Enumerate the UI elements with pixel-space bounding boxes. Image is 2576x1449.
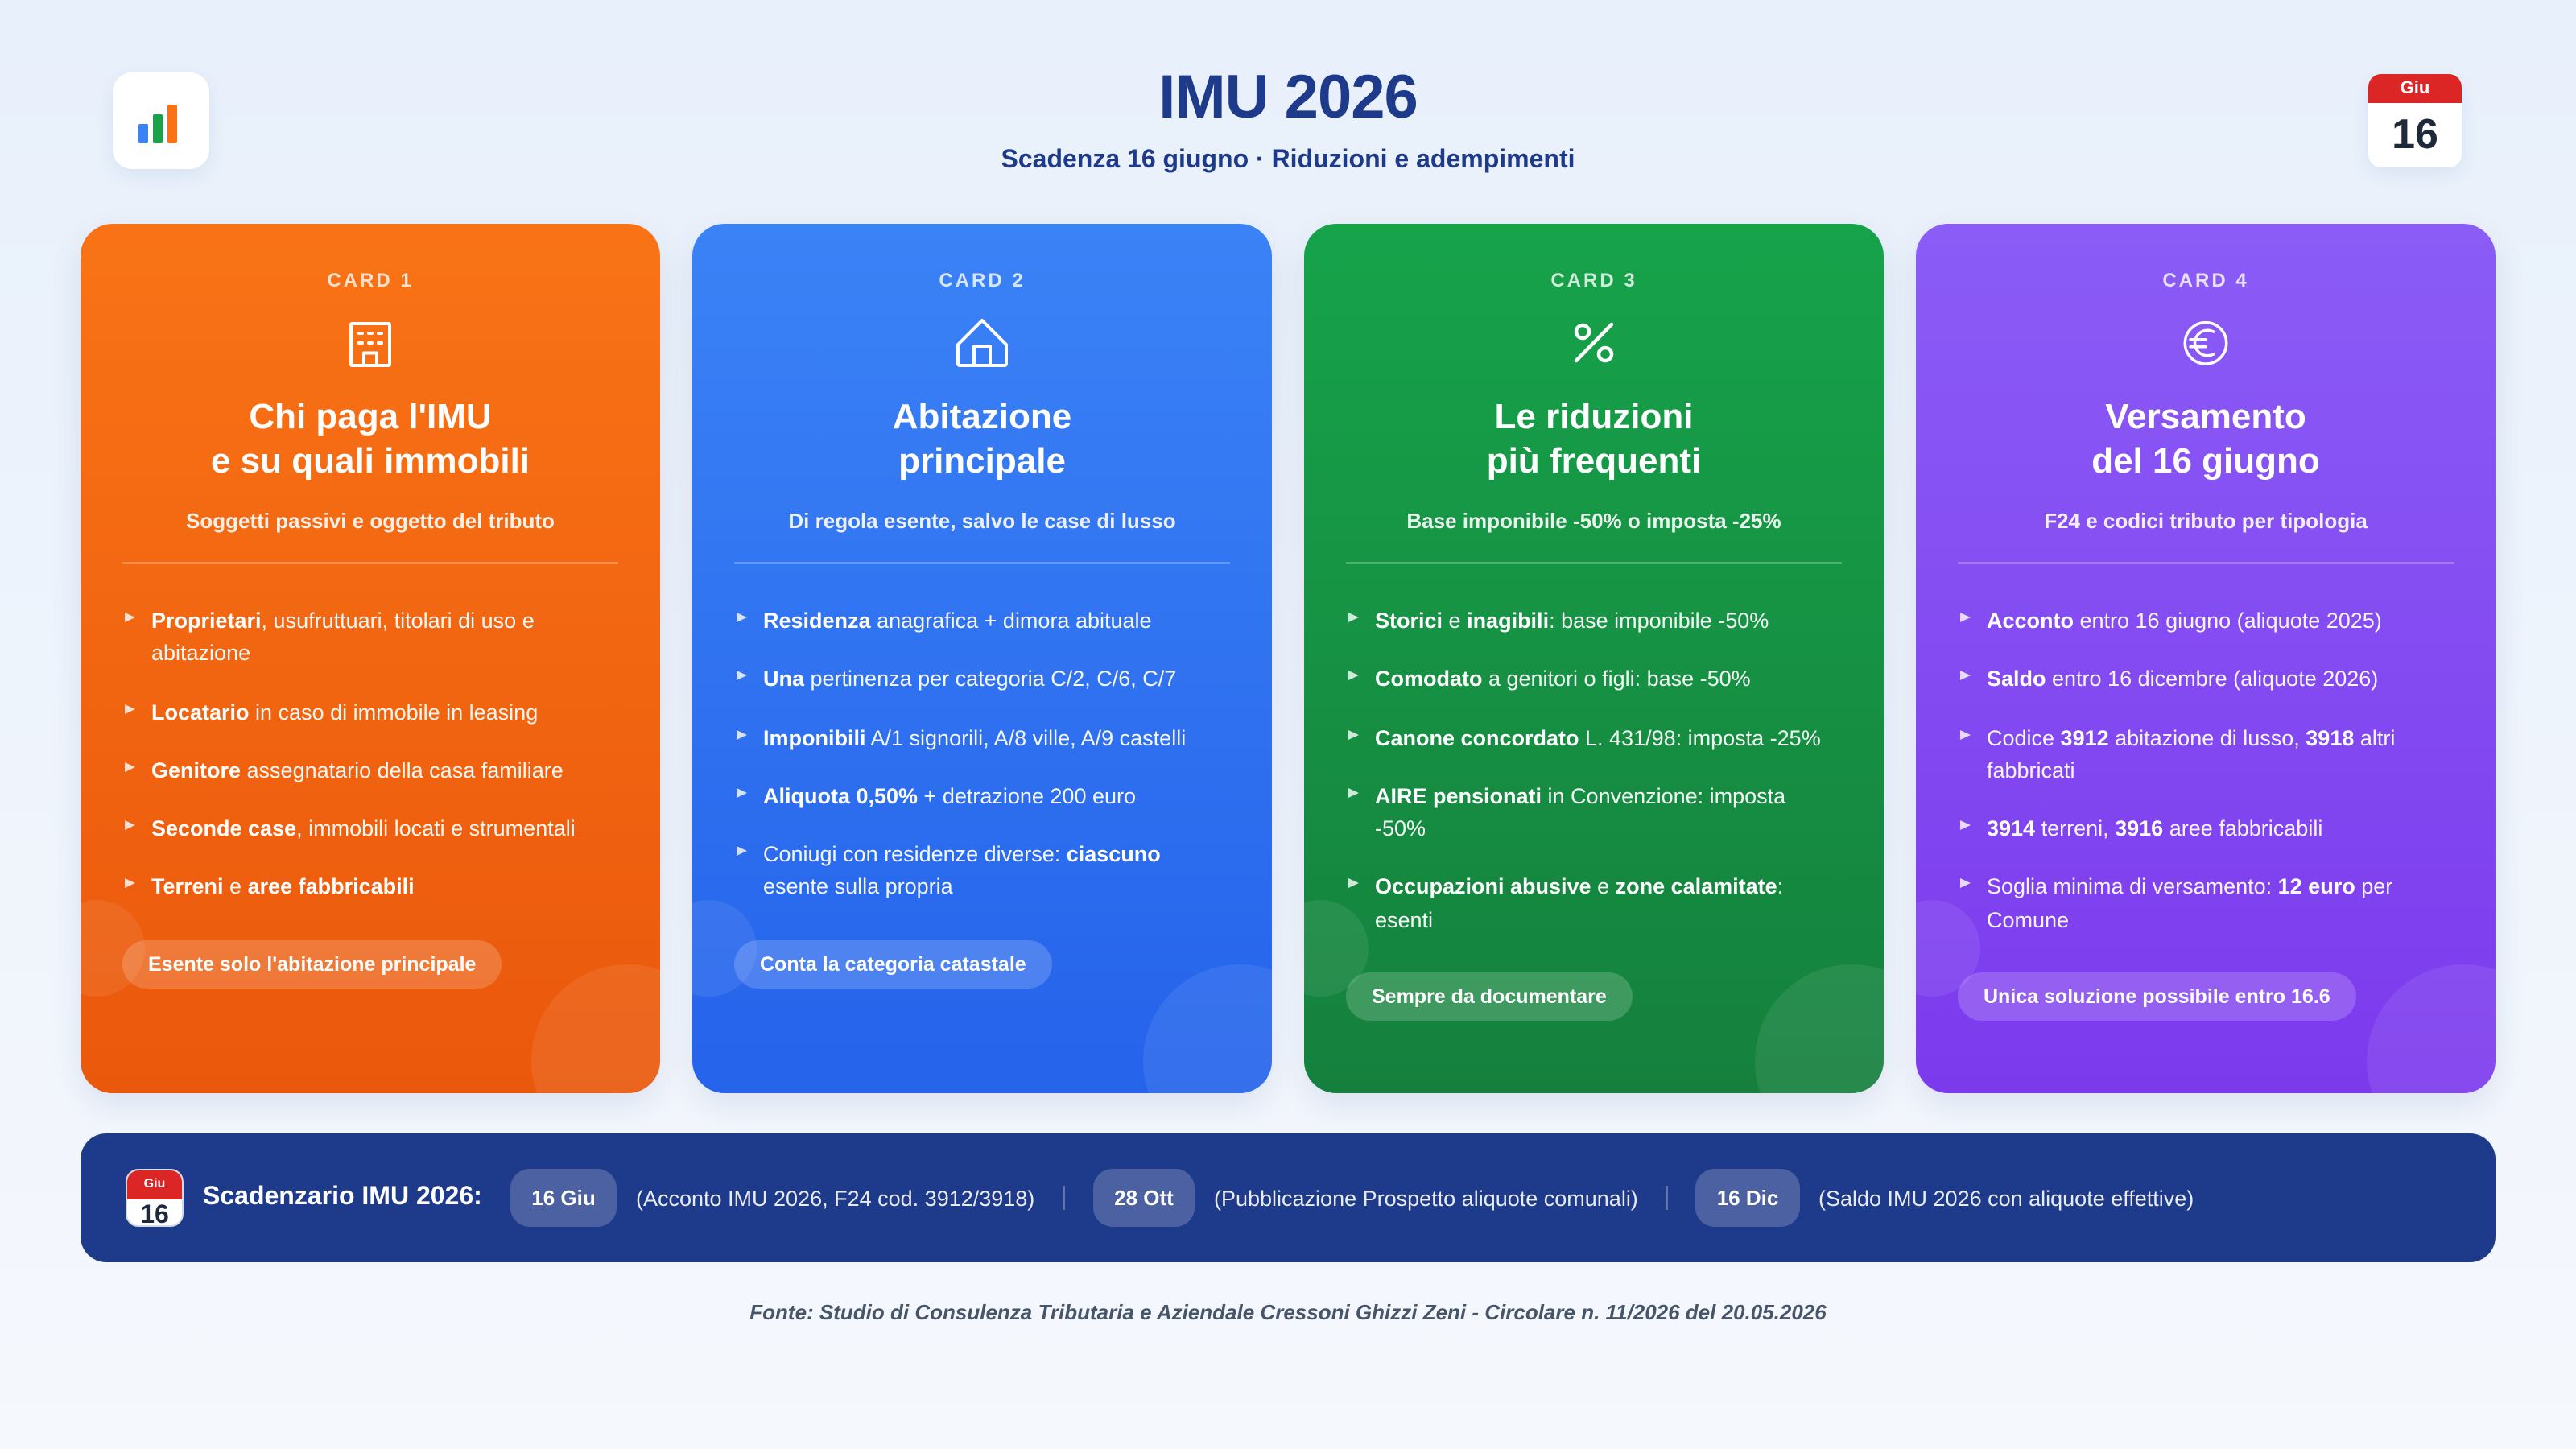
icon: small calendar: Giu (144, 1177, 165, 1191)
icon: percent (1575, 322, 1613, 362)
date pill: 16 Dic (1695, 1169, 1800, 1227)
card 3 callout (1346, 972, 1633, 1021)
card 3 list: Comodato a genitori o figli: base -50% (1375, 667, 1751, 691)
card 2 list: Residenza anagrafica + dimora abituale (763, 609, 1152, 633)
panel: card 3 (1304, 224, 1884, 1093)
card 1 callout (122, 940, 502, 989)
card 4 heading (2091, 397, 2320, 481)
card 3 label: CARD 3 (1550, 270, 1637, 291)
card 3 list: AIRE pensionati in Convenzione: imposta -50% (1375, 784, 1785, 840)
card 2 list: Una pertinenza per categoria C/2, C/6, C/7 (763, 667, 1176, 691)
card 2 label: CARD 2 (939, 270, 1026, 291)
card 3 heading (1487, 397, 1701, 481)
card 4 callout (1958, 972, 2356, 1021)
card 1 subheading: Soggetti passivi e oggetto del tributo (186, 509, 555, 533)
card 1 heading: Chi paga l'IMU (249, 397, 492, 436)
card 1 list (125, 609, 576, 898)
panel: deadline bar (80, 1133, 2496, 1262)
card 2 heading: Abitazione (893, 397, 1071, 436)
subtitle: Scadenza 16 giugno · Riduzioni e adempimenti (1001, 144, 1575, 173)
card 3 list: Storici e inagibili: base imponibile -50% (1375, 609, 1769, 633)
card 4 list: Saldo entro 16 dicembre (aliquote 2026) (1987, 667, 2378, 691)
card 3 list (1348, 609, 1821, 932)
date pill: 16 Dic: 16 Dic (1717, 1186, 1778, 1210)
logo: bar chart icon (113, 72, 209, 169)
card 2 heading (893, 397, 1071, 481)
card 2 list: Aliquota 0,50% + detrazione 200 euro (763, 784, 1136, 808)
card 1 label: CARD 1 (327, 270, 414, 291)
card 2 callout (734, 940, 1052, 989)
card 3 list: Canone concordato L. 431/98: imposta -25% (1375, 726, 1821, 750)
card 4 list: 3914 terreni, 3916 aree fabbricabili (1987, 816, 2322, 840)
panel: card 4 (1916, 224, 2496, 1093)
card 4 list: Acconto entro 16 giugno (aliquote 2025) (1987, 609, 2382, 633)
card 2 heading: principale (898, 441, 1066, 481)
card 4 list: Codice 3912 abitazione di lusso, 3918 altri fabbricati (1987, 726, 2395, 782)
card 1 list: Seconde case, immobili locati e strumentali (151, 816, 576, 840)
date description: 16 Dic: (Saldo IMU 2026 con aliquote effettive) (1818, 1187, 2194, 1211)
card 3 heading: Le riduzioni (1495, 397, 1693, 436)
card 3 callout: Sempre da documentare (1372, 985, 1607, 1008)
card 2 list (737, 609, 1186, 898)
card 1 callout: Esente solo l'abitazione principale (148, 953, 476, 976)
card 4 heading: Versamento (2105, 397, 2306, 436)
card 4 callout: Unica soluzione possibile entro 16.6 (1984, 985, 2330, 1008)
card 3 subheading: Base imponibile -50% o imposta -25% (1406, 509, 1781, 533)
card 1 list: Proprietari, usufruttuari, titolari di uso e abitazione (151, 609, 535, 665)
card 1 list: Locatario in caso di immobile in leasing (151, 700, 538, 724)
card 2 list: Coniugi con residenze diverse: ciascuno esente sulla propria (763, 842, 1161, 898)
card 4 list: Soglia minima di versamento: 12 euro per Comune (1987, 874, 2392, 932)
date description: 28 Ott: (Pubblicazione Prospetto aliquote comunali) (1214, 1187, 1638, 1211)
date pill: 28 Ott (1093, 1169, 1195, 1227)
card 2 callout: Conta la categoria catastale (760, 953, 1026, 976)
card 1 heading: e su quali immobili (211, 441, 530, 481)
icon: calendar 16 giugno (2368, 74, 2462, 167)
card 4 heading: del 16 giugno (2091, 441, 2320, 481)
title: IMU 2026 (1158, 63, 1418, 131)
panel: card 1 (80, 224, 660, 1093)
card 3 list: Occupazioni abusive e zone calamitate: esenti (1375, 874, 1783, 932)
icon: calendar 16 giugno: 16 (2392, 111, 2438, 158)
card 2 subheading: Di regola esente, salvo le case di lusso (788, 509, 1176, 533)
icon: euro coin (2183, 320, 2228, 365)
panel: card 2 (692, 224, 1272, 1093)
deadline bar heading: Scadenzario IMU 2026: (203, 1181, 482, 1210)
card 1 heading (211, 397, 530, 481)
card 4 label: CARD 4 (2162, 270, 2249, 291)
icon: building (349, 322, 391, 367)
date description: 16 Giu: (Acconto IMU 2026, F24 cod. 3912/3918) (636, 1187, 1034, 1211)
card 4 subheading: F24 e codici tributo per tipologia (2044, 509, 2368, 533)
card 3 heading: più frequenti (1487, 441, 1701, 481)
icon: house (956, 319, 1008, 367)
date pill: 16 Giu (510, 1169, 617, 1227)
card 2 list: Imponibili A/1 signorili, A/8 ville, A/9 castelli (763, 726, 1186, 750)
card 1 list: Genitore assegnatario della casa familiare (151, 758, 564, 782)
date pill: 28 Ott: 28 Ott (1114, 1186, 1174, 1210)
card 1 list: Terreni e aree fabbricabili (151, 874, 415, 898)
card 4 list (1960, 609, 2395, 932)
icon: calendar 16 giugno: Giu (2401, 77, 2429, 97)
source footer: Fonte: Studio di Consulenza Tributaria e Aziendale Cressoni Ghizzi Zeni - Circolare n. 11/2026 del 20.05.2026 (749, 1300, 1827, 1324)
icon: small calendar (126, 1169, 184, 1227)
date pill: 16 Giu: 16 Giu (531, 1186, 596, 1210)
